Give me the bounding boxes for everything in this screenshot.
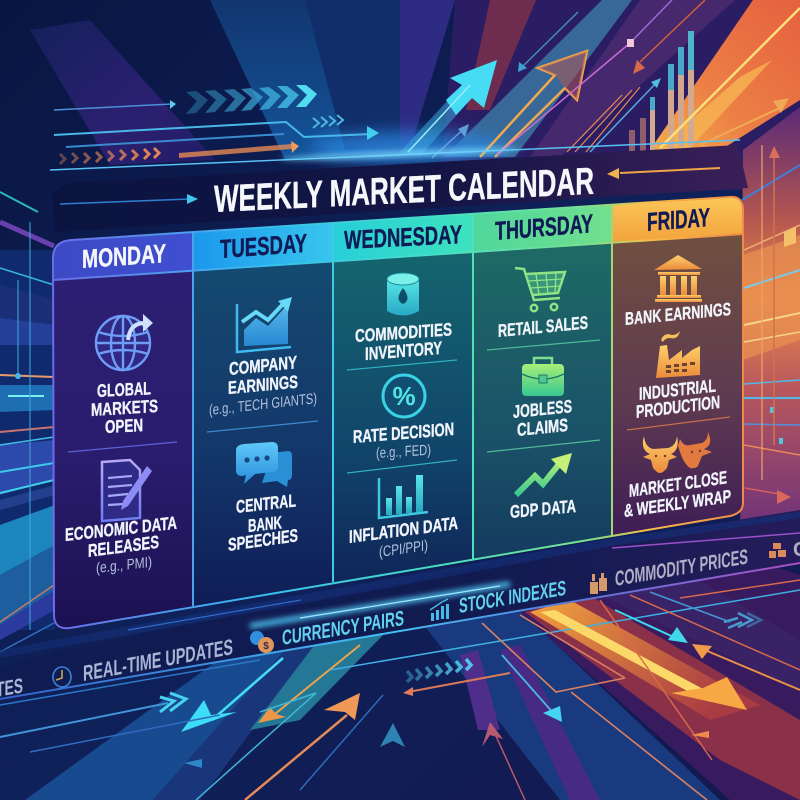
arrow: red vertical [769,146,780,445]
icon: percent circle: % [392,381,416,411]
arrow: orange big up [245,693,360,800]
icon: bar chart [379,475,428,518]
arrow: orange right [700,98,789,145]
text: market close and weekly wrap: & WEEKLY WRAP [624,486,731,521]
text: market close and weekly wrap [624,467,731,521]
icon: factory [656,331,700,378]
top light rays [30,0,800,190]
arrow: big cyan left [181,658,283,732]
text: economic data releases: ECONOMIC DATA [65,513,177,545]
icon: rising chart [237,297,292,352]
arrow: elbow cyan [54,122,379,147]
text: commodities inventory [355,319,452,364]
lines: orange far right [600,580,800,760]
icon: document and pen [102,460,152,521]
heading: Monday: MONDAY [82,238,166,274]
arrow: cyan left chevrons [0,660,260,752]
text: inflation data: INFLATION DATA [349,513,458,547]
chevrons: small cyan [313,115,343,128]
Friday content [624,255,731,521]
bottom decorative arrows [0,580,800,800]
icon: currency coins: $ [263,641,269,652]
text: rate decision: RATE DECISION [353,419,454,447]
text: market close and weekly wrap: MARKET CLOSE [629,467,727,501]
icon: briefcase [522,358,564,396]
column: Monday [50,232,193,635]
ticker: stock indexes: STOCK INDEXES [459,577,566,618]
text: jobless claims [513,396,572,440]
text: company earnings [209,352,317,419]
chart: top-right bars [629,31,694,155]
text: retail sales: RETAIL SALES [498,312,588,341]
text: inflation data [349,513,458,561]
text: rate decision: (e.g., FED) [376,442,431,462]
text: economic data releases [65,513,177,577]
icon: clock [53,667,71,687]
icon: stock bars [430,599,449,621]
text: commodities inventory: COMMODITIES [355,319,452,346]
icon: commodity stack [590,573,607,594]
column: Wednesday [333,214,473,586]
arrow: small blue left [54,100,176,110]
arrow: orange thin left [258,645,360,723]
text: industrial production: INDUSTRIAL [639,376,716,404]
chevrons: orange [60,148,159,164]
arrow: orange [179,141,299,158]
column: Thursday [473,205,612,563]
panel frame [53,197,743,628]
chevrons: large cyan [186,85,317,114]
text: company earnings: (e.g., TECH GIANTS) [209,390,317,419]
Wednesday content [347,273,458,561]
glow line [50,140,740,170]
text: industrial production: PRODUCTION [636,392,720,422]
triangle: teal [380,723,405,747]
streak: yellow [660,8,800,148]
panel: weekly calendar [50,195,750,635]
icon: shopping cart [515,268,565,311]
arrow: blue top right [650,592,730,622]
arrow: thin up orange [482,722,525,800]
icon: currency coins [250,631,274,653]
text: jobless claims: JOBLESS [513,396,572,422]
heading: Thursday: THURSDAY [495,208,593,246]
chevrons: cyan centre [407,659,471,682]
text: economic data releases: RELEASES [88,532,159,561]
text: company earnings: EARNINGS [228,372,298,398]
text: inflation data: (CPI/PPI) [379,537,428,561]
icon: bull and bear heads [643,432,712,473]
arrow: cyan small up [590,78,661,152]
Thursday content [487,268,600,522]
text: global markets open: MARKETS [91,396,158,420]
right side streaks [740,107,800,560]
text: central bank speeches: SPEECHES [228,525,298,555]
top decorative arrows [50,0,800,504]
arrow: title right [607,168,720,179]
icon: bank [654,255,702,302]
text: economic data releases: (e.g., PMI) [96,554,152,577]
text: global markets open: OPEN [105,415,143,437]
text: bank earnings: BANK EARNINGS [625,299,731,329]
heading: Friday: FRIDAY [647,202,710,237]
heading: Tuesday: TUESDAY [220,228,307,264]
text: central bank speeches: CENTRAL [236,490,296,517]
arrow: cyan right [615,610,688,643]
arrow: orange left centre [403,673,510,696]
icon: speech bubbles [236,442,292,487]
ticker: currency pairs: CURRENCY PAIRS [282,607,404,650]
arrow: yellow outline [480,51,587,157]
icon: globe with arrow [96,314,153,370]
triangle: small blue [184,759,202,768]
arrow: cyan down [502,655,562,722]
text: rate decision [353,419,454,462]
text: jobless claims: CLAIMS [517,415,568,440]
text: global markets open [91,378,158,437]
icon: oil barrel [387,273,419,316]
text: global markets open: GLOBAL [97,378,151,401]
text: gdp data: GDP DATA [510,496,576,522]
icon: percent circle [383,375,425,417]
line with marker [497,0,672,155]
icon: rising arrow [516,453,572,495]
column: Friday [612,195,750,539]
ticker: real-time updates: REAL-TIME UPDATES [83,634,233,686]
ticker strip [0,510,800,702]
text: commodities inventory: INVENTORY [365,338,442,364]
arrow: title left [60,194,198,204]
arrow: blue down-left [518,12,578,72]
arrow: large cyan up [400,60,497,156]
left side streaks [0,192,55,652]
icon: metal bars pile [769,543,786,558]
arrow: small blue up [432,124,469,158]
text: central bank speeches [228,490,298,555]
heading: Wednesday: WEDNESDAY [344,219,462,255]
orange thin lines [567,87,640,152]
bottom rays [25,562,800,800]
Monday content [65,314,177,577]
arrow: orange down-left [633,0,705,74]
arrow: orange from right [692,644,800,690]
title banner [52,145,748,232]
arrow: cyan elbow [196,693,383,800]
chevrons: blue right [724,613,761,628]
triangle: small orange [691,731,709,738]
text: industrial production [636,376,720,422]
title: WEEKLY MARKET CALENDAR [214,161,594,221]
Tuesday content [207,297,318,555]
text: central bank speeches: BANK [248,512,282,536]
day headings [82,202,710,274]
column: Tuesday [194,224,332,540]
text: company earnings: COMPANY [229,352,297,379]
arrow: big orange [540,610,747,710]
arrow: orange lower right [745,488,791,504]
line: blue long [330,590,800,670]
arrow: orange elbow [482,615,707,800]
